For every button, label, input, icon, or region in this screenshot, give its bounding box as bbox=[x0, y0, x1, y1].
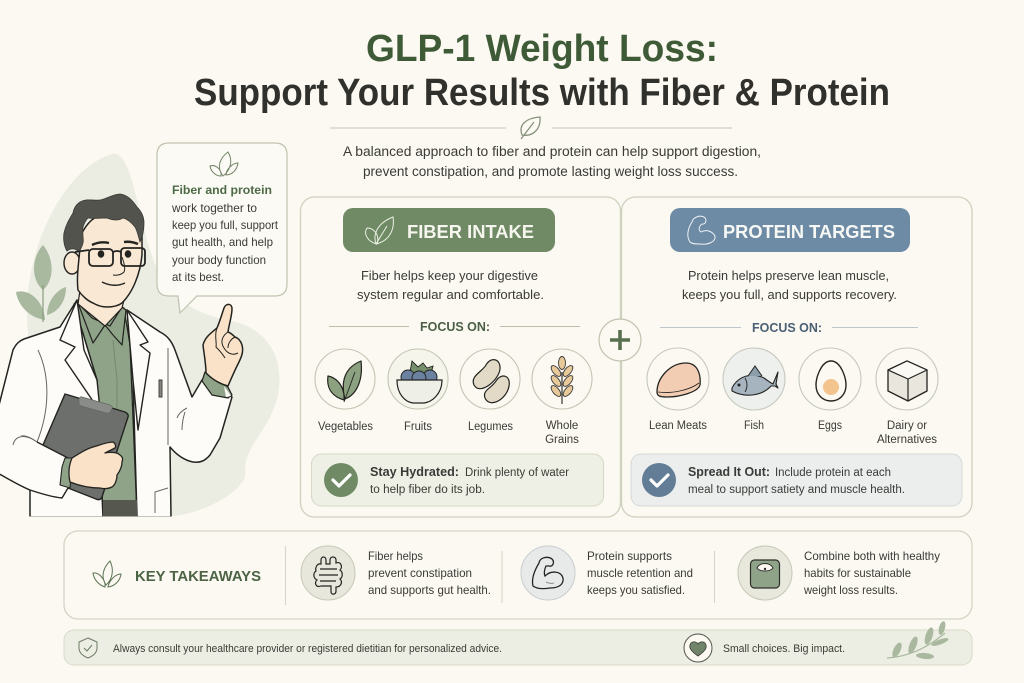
label: dairy or alternatives: Alternatives bbox=[877, 434, 937, 446]
callout text: your body function bbox=[172, 253, 266, 267]
stay hydrated box bbox=[312, 454, 604, 506]
takeaway text: combine: habits for sustainable bbox=[804, 566, 911, 580]
takeaway text: fiber: Fiber helps bbox=[368, 549, 423, 563]
icon: dairy or alternatives bbox=[876, 348, 938, 410]
lab coat left body bbox=[0, 300, 103, 517]
icon: fish bbox=[723, 348, 785, 410]
callout bbox=[157, 143, 287, 313]
disclaimer text: Always consult your healthcare provider or registered dietitian for personalized advice. bbox=[113, 643, 502, 655]
collar bbox=[78, 303, 126, 345]
callout text bbox=[171, 183, 279, 284]
takeaway text: fiber: prevent constipation bbox=[368, 566, 472, 580]
icon: intestine bbox=[301, 546, 355, 600]
fiber heading: FIBER INTAKE bbox=[407, 222, 534, 242]
fiber description bbox=[357, 268, 544, 302]
coat details bbox=[13, 348, 187, 513]
fiber description: Fiber helps keep your digestive bbox=[361, 268, 538, 283]
icon: fruits bbox=[388, 349, 448, 409]
glasses and facial features bbox=[75, 242, 145, 285]
clipboard bbox=[43, 394, 128, 500]
pen bbox=[159, 380, 162, 397]
neck bbox=[78, 290, 126, 326]
stay hydrated box: Drink plenty of water bbox=[465, 467, 569, 479]
pointing hand bbox=[203, 304, 243, 386]
hand on clipboard bbox=[69, 442, 123, 489]
label: fish: Fish bbox=[744, 420, 764, 432]
takeaway text: protein: Protein supports bbox=[587, 549, 672, 563]
icon: eggs bbox=[799, 348, 861, 410]
background blob bbox=[27, 154, 279, 516]
label: dairy or alternatives bbox=[877, 420, 937, 446]
stay hydrated box: Stay Hydrated: bbox=[370, 464, 459, 479]
label: whole grains: Whole bbox=[546, 420, 578, 432]
callout text: Fiber and protein bbox=[172, 183, 272, 197]
footer bar bbox=[64, 620, 972, 665]
takeaway text: protein: muscle retention and bbox=[587, 566, 693, 580]
face bbox=[77, 214, 142, 307]
stay hydrated box: to help fiber do its job. bbox=[370, 484, 485, 496]
label: lean meats: Lean Meats bbox=[649, 420, 707, 432]
left cuff bbox=[60, 458, 73, 488]
icon: scale bbox=[738, 546, 792, 600]
icon: whole grains bbox=[532, 349, 592, 409]
label: vegetables: Vegetables bbox=[318, 421, 373, 433]
icon: plant behind doctor bbox=[16, 245, 66, 322]
icon: lean meats bbox=[647, 348, 709, 410]
takeaway text: fiber bbox=[368, 549, 491, 597]
left lapel bbox=[60, 300, 103, 440]
protein description bbox=[682, 268, 897, 302]
protein description: keeps you full, and supports recovery. bbox=[682, 287, 897, 302]
protein heading: PROTEIN TARGETS bbox=[723, 222, 895, 242]
doctor illustration bbox=[0, 154, 279, 520]
label: eggs: Eggs bbox=[818, 420, 842, 432]
lab coat right body bbox=[127, 310, 232, 517]
fiber description: system regular and comfortable. bbox=[357, 287, 544, 302]
shirt bbox=[74, 304, 137, 517]
callout text: work together to bbox=[171, 201, 257, 215]
protein focus on: FOCUS ON: bbox=[752, 321, 822, 335]
takeaway text: combine: weight loss results. bbox=[803, 583, 898, 597]
left arm sleeve bbox=[0, 420, 68, 498]
icon: legumes bbox=[460, 349, 520, 409]
right lapel bbox=[127, 310, 150, 430]
icon: muscle bbox=[521, 546, 575, 600]
panel: protein targets bbox=[622, 197, 972, 517]
spread it out box: Include protein at each bbox=[775, 467, 891, 479]
panel: key takeaways bbox=[64, 531, 972, 619]
icon: shield bbox=[79, 638, 97, 658]
takeaway text: protein bbox=[587, 549, 693, 597]
icon: plus connector bbox=[599, 319, 641, 361]
hair bbox=[64, 194, 144, 252]
callout text: keep you full, support bbox=[172, 218, 279, 232]
callout text: at its best. bbox=[172, 270, 224, 284]
callout text: gut health, and help bbox=[172, 235, 273, 249]
ear bbox=[64, 252, 80, 274]
intro text bbox=[343, 144, 761, 179]
fiber heading bbox=[343, 208, 555, 252]
title: Support Your Results with Fiber & Protein bbox=[194, 72, 890, 114]
label: dairy or alternatives: Dairy or bbox=[887, 420, 927, 432]
intro text: prevent constipation, and promote lasting weight loss success. bbox=[363, 164, 738, 179]
belt bbox=[103, 500, 137, 517]
icon: callout leaves bbox=[210, 152, 238, 176]
icon: heart bbox=[684, 634, 712, 662]
takeaway text: combine: Combine both with healthy bbox=[804, 549, 940, 563]
protein description: Protein helps preserve lean muscle, bbox=[688, 268, 889, 283]
protein heading bbox=[670, 208, 910, 252]
spread it out box: Spread It Out: bbox=[688, 464, 770, 479]
takeaway text: fiber: and supports gut health. bbox=[368, 583, 491, 597]
label: whole grains: Grains bbox=[545, 434, 579, 446]
title: GLP-1 Weight Loss: bbox=[366, 28, 718, 70]
icon: sprig bbox=[887, 620, 949, 660]
icon: vegetables bbox=[315, 349, 375, 409]
icon: key takeaways leaves bbox=[93, 561, 121, 587]
right cuff bbox=[202, 372, 232, 398]
tagline: Small choices. Big impact. bbox=[723, 643, 845, 655]
spread it out box: meal to support satiety and muscle health. bbox=[688, 484, 905, 496]
takeaway text: combine bbox=[803, 549, 940, 597]
intro text: A balanced approach to fiber and protein can help support digestion, bbox=[343, 144, 761, 159]
fiber focus on: FOCUS ON: bbox=[420, 320, 490, 334]
label: legumes: Legumes bbox=[468, 421, 513, 433]
cover coat hem bbox=[0, 516, 180, 520]
label: whole grains bbox=[545, 420, 579, 446]
key takeaways heading: KEY TAKEAWAYS bbox=[135, 568, 261, 585]
icon: title divider with leaf bbox=[330, 117, 732, 139]
label: fruits: Fruits bbox=[404, 421, 432, 433]
takeaway text: protein: keeps you satisfied. bbox=[587, 583, 685, 597]
panel: fiber intake bbox=[300, 197, 620, 517]
spread it out box bbox=[631, 454, 962, 506]
title bbox=[194, 28, 890, 114]
